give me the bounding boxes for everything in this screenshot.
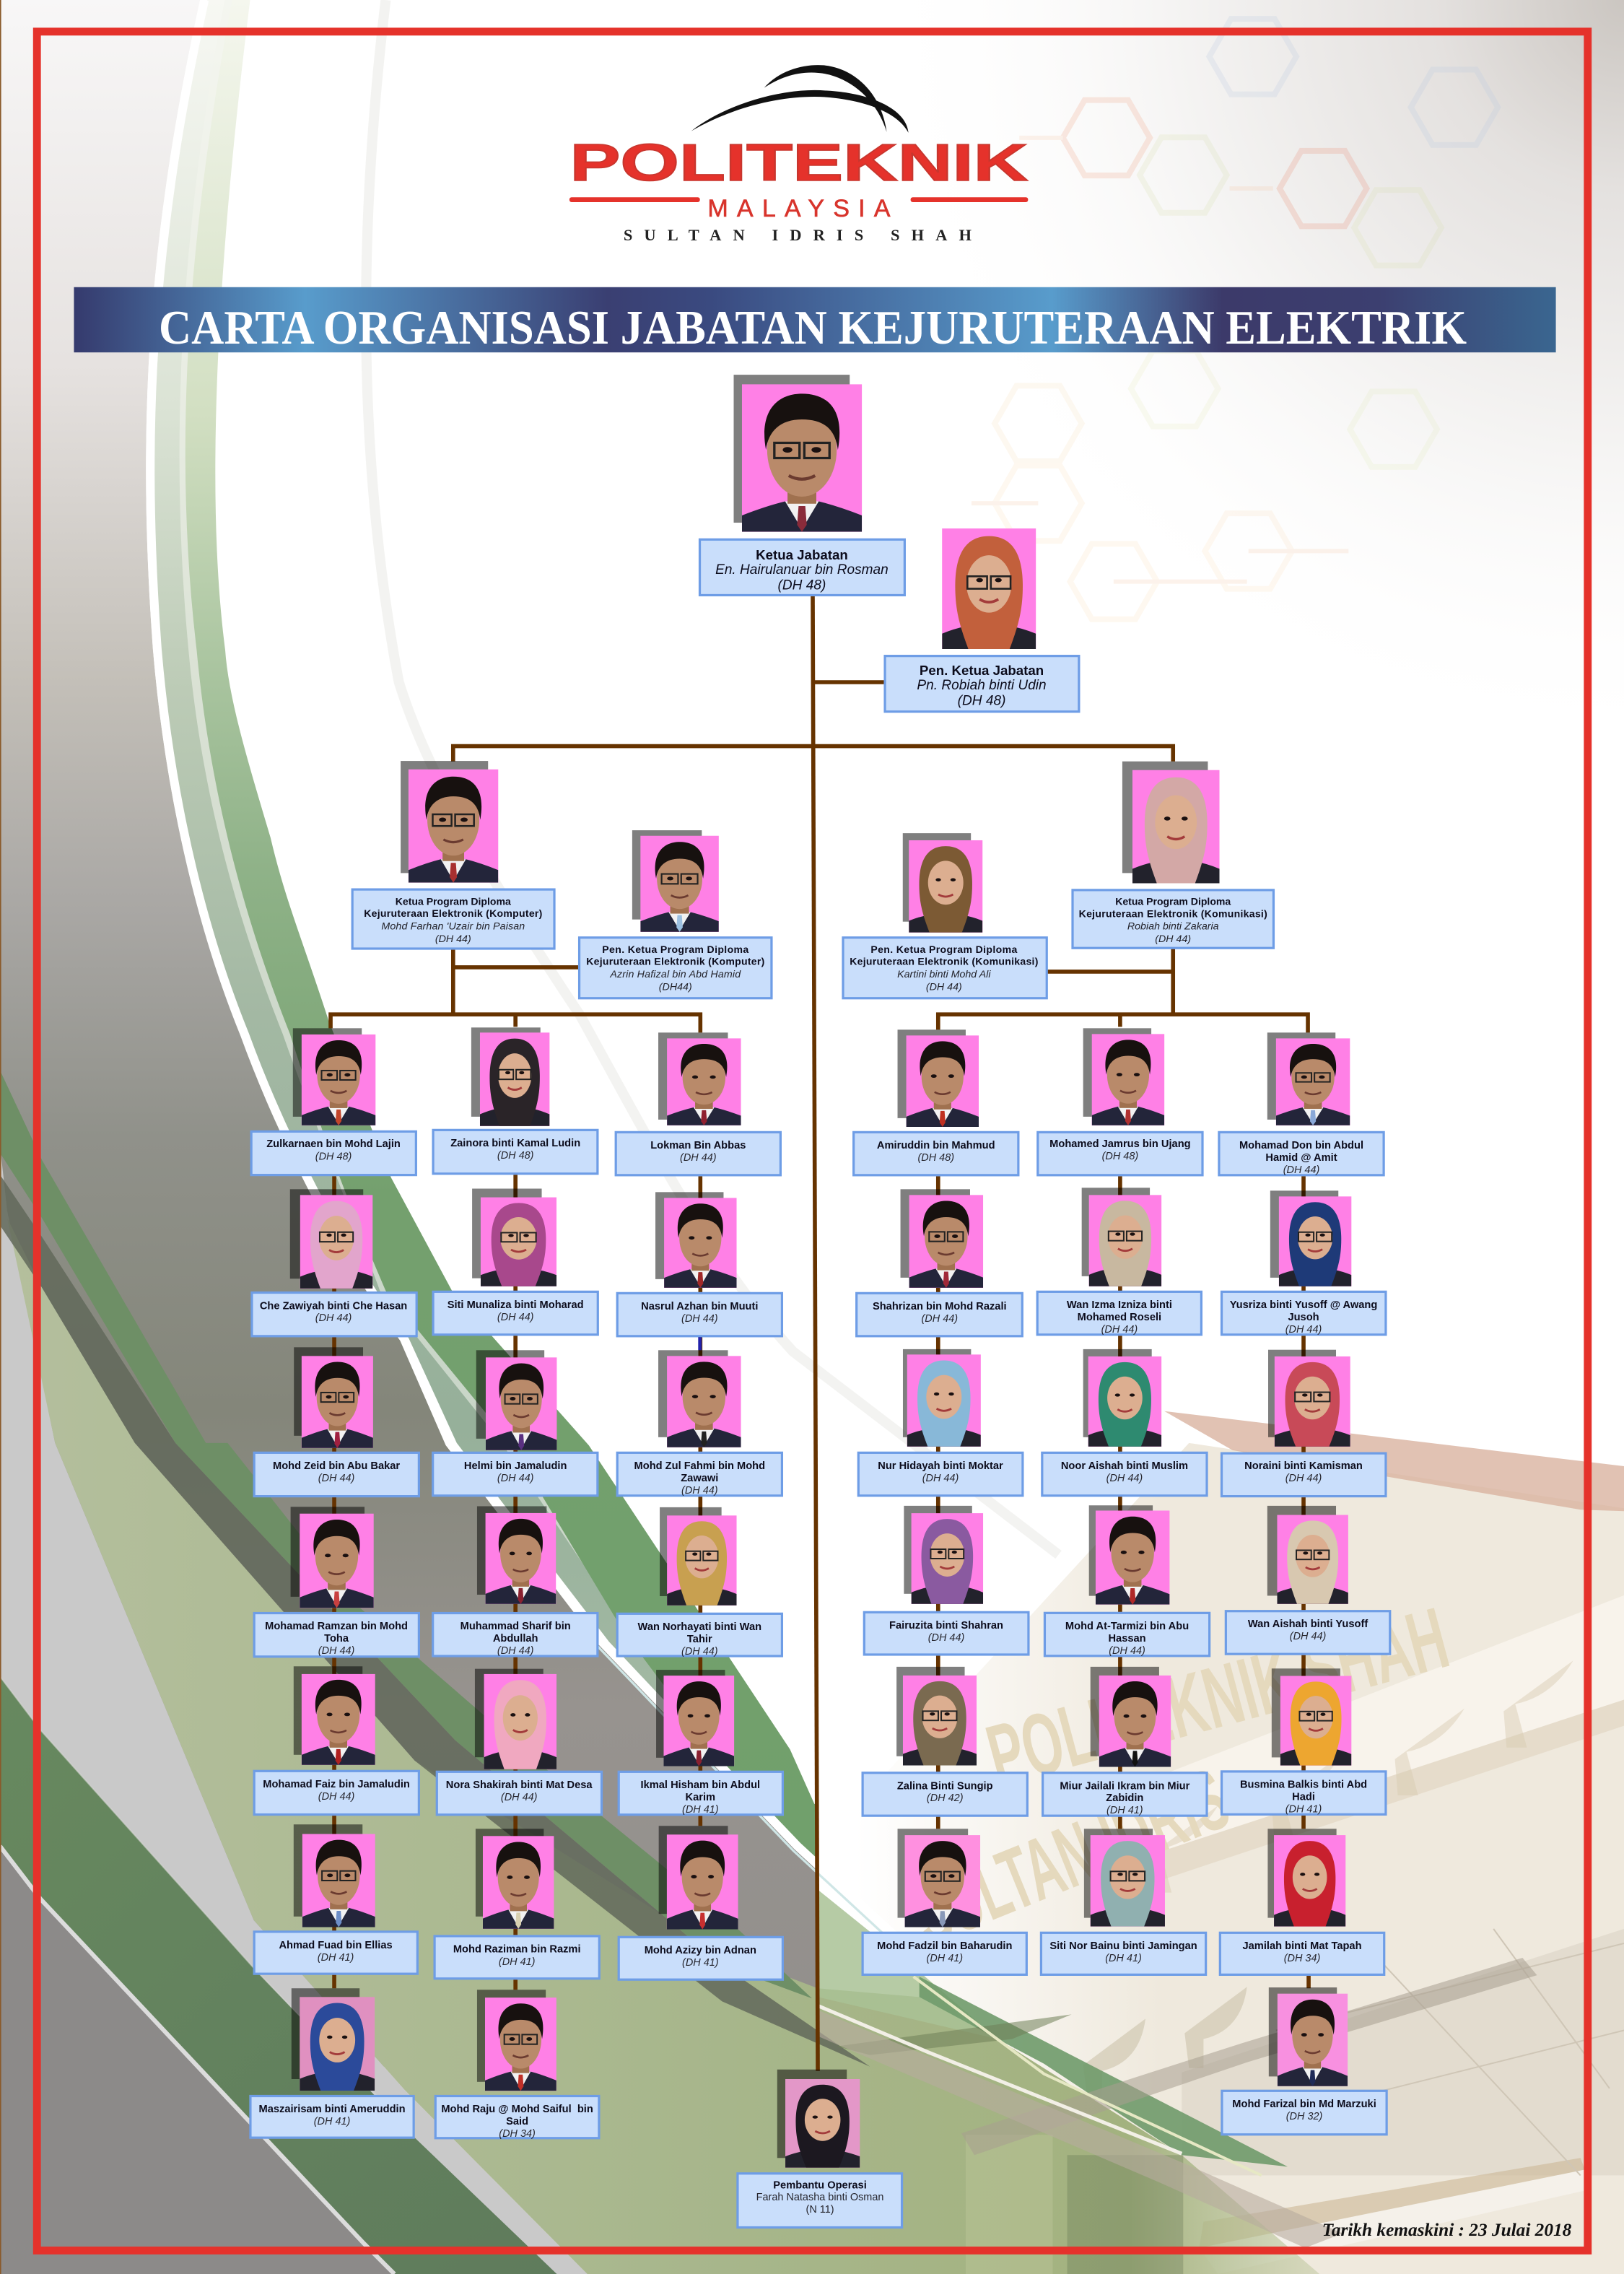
photo bbox=[1089, 1505, 1169, 1605]
label: Mohd Farizal bin Md Marzuki bbox=[1232, 2099, 1376, 2110]
person: Pen. Ketua Program Komunikasi bbox=[843, 833, 1047, 998]
person: Mohamad Faiz bin Jamaludin bbox=[254, 1666, 419, 1815]
person: Yusriza binti Yusoff @ Awang Jusoh bbox=[1222, 1190, 1386, 1336]
label: Wan Aishah binti Yusoff bbox=[1248, 1619, 1368, 1630]
label: (DH 48) bbox=[497, 1150, 533, 1162]
label: Noor Aishah binti Muslim bbox=[1061, 1460, 1188, 1472]
label: Pen. Ketua Jabatan: (DH 48) bbox=[958, 693, 1005, 708]
person: Nora Shakirah binti Mat Desa bbox=[437, 1669, 602, 1815]
photo bbox=[294, 1347, 373, 1448]
label: (DH 44) bbox=[681, 1313, 718, 1325]
label bbox=[254, 1452, 419, 1497]
label bbox=[433, 1130, 598, 1174]
person: Lokman Bin Abbas bbox=[616, 1032, 780, 1175]
person: Ketua Program Komunikasi bbox=[1073, 762, 1273, 948]
photo bbox=[1267, 1506, 1348, 1604]
photo: Hairulanuar bin Rosman bbox=[734, 375, 862, 532]
label: Mohamad Don bin Abdul bbox=[1239, 1140, 1363, 1151]
photo: Kartini binti Mohd Ali bbox=[903, 833, 982, 933]
logo: Politeknik Malaysia Sultan Idris Shah: MALAYSIA bbox=[707, 195, 891, 222]
label: Ketua Program Diploma Komputer bbox=[352, 889, 554, 949]
photo bbox=[1083, 1028, 1164, 1125]
label: Wan Izma Izniza binti bbox=[1067, 1299, 1172, 1311]
label: (DH 41) bbox=[499, 1956, 535, 1968]
label: (DH 44) bbox=[928, 1632, 964, 1644]
label: (DH 41) bbox=[682, 1804, 719, 1816]
label bbox=[250, 2096, 414, 2138]
label: Pen. Ketua Program Diploma Komputer: Kejuruteraan Elektronik (Komputer) bbox=[586, 956, 764, 967]
photo bbox=[476, 1350, 556, 1450]
label: (DH 44) bbox=[497, 1473, 533, 1484]
label: (DH 44) bbox=[1109, 1645, 1145, 1657]
label bbox=[619, 1772, 782, 1816]
label: (DH 44) bbox=[315, 1312, 352, 1324]
photo bbox=[1083, 1349, 1161, 1447]
label: (DH 44) bbox=[1285, 1473, 1322, 1484]
label: Pen. Ketua Program Diploma Komputer: Azrin Hafizal bin Abd Hamid bbox=[609, 969, 741, 980]
person: Mohd Fadzil bin Baharudin bbox=[863, 1829, 1026, 1974]
label: (DH 44) bbox=[501, 1792, 537, 1803]
label bbox=[857, 1293, 1022, 1336]
label bbox=[863, 1933, 1026, 1974]
person: Che Zawiyah binti Che Hasan bbox=[252, 1189, 416, 1336]
label: Wan Norhayati binti Wan bbox=[638, 1621, 761, 1633]
label: Miur Jailali Ikram bin Miur bbox=[1060, 1780, 1190, 1792]
label: Ketua Program Diploma Komputer: Ketua Program Diploma bbox=[396, 896, 511, 907]
label: Amiruddin bin Mahmud bbox=[877, 1140, 995, 1151]
photo bbox=[477, 1990, 556, 2091]
photo bbox=[1091, 1667, 1171, 1767]
photo bbox=[896, 1667, 977, 1765]
label: Nasrul Azhan bin Muuti bbox=[641, 1301, 758, 1312]
person: Wan Norhayati binti Wan Tahir bbox=[617, 1507, 782, 1657]
label: (DH 44) bbox=[1290, 1631, 1326, 1642]
label bbox=[1044, 1613, 1210, 1657]
person: Amiruddin bin Mahmud bbox=[854, 1029, 1018, 1175]
photo bbox=[476, 1829, 554, 1929]
connector lines of the organisation chart bbox=[331, 596, 1309, 2071]
label: Ketua Jabatan: En. Hairulanuar bin Rosman bbox=[715, 562, 889, 578]
label: Che Zawiyah binti Che Hasan bbox=[260, 1300, 407, 1312]
person: Mohd Azizy bin Adnan bbox=[619, 1826, 782, 1979]
label: Pen. Ketua Program Diploma Komunikasi bbox=[843, 938, 1047, 998]
person: Mohamad Ramzan bin Mohd Toha bbox=[254, 1507, 419, 1657]
label: (DH 44) bbox=[318, 1645, 354, 1657]
label: Pen. Ketua Program Diploma Komputer bbox=[580, 938, 772, 998]
label: Fairuzita binti Shahran bbox=[889, 1620, 1003, 1632]
label bbox=[433, 1613, 598, 1657]
person: Nasrul Azhan bin Muuti bbox=[617, 1192, 782, 1336]
label bbox=[435, 2096, 599, 2140]
label: Pembantu Operasi: Pembantu Operasi bbox=[773, 2179, 867, 2191]
photo bbox=[898, 1029, 979, 1127]
label: (DH 44) bbox=[1283, 1164, 1319, 1176]
photo: Azrin Hafizal bbox=[632, 830, 719, 932]
person: Noraini binti Kamisman bbox=[1222, 1350, 1386, 1497]
label: Nora Shakirah binti Mat Desa bbox=[446, 1779, 593, 1791]
person: Mohamad Don bin Abdul Hamid @ Amit bbox=[1219, 1032, 1384, 1176]
photo bbox=[658, 1337, 741, 1447]
person: Pen. Ketua Program Komputer bbox=[580, 830, 772, 998]
label: (DH 41) bbox=[314, 2116, 350, 2127]
label: Pen. Ketua Program Diploma Komunikasi: Kartini binti Mohd Ali bbox=[897, 969, 991, 980]
label: Zainora binti Kamal Ludin bbox=[450, 1138, 580, 1149]
label: Ketua Program Diploma Komunikasi: Kejuruteraan Elektronik (Komunikasi) bbox=[1079, 908, 1267, 920]
photo bbox=[471, 1027, 549, 1126]
label: (DH 34) bbox=[499, 2128, 536, 2140]
person: Mohd Farizal bin Md Marzuki bbox=[1222, 1987, 1387, 2135]
label: Pen. Ketua Program Diploma Komputer: Pen. Ketua Program Diploma bbox=[602, 944, 748, 955]
photo bbox=[1269, 1987, 1348, 2086]
label: Mohd Fadzil bin Baharudin bbox=[877, 1940, 1012, 1952]
label: Zulkarnaen bin Mohd Lajin bbox=[266, 1138, 401, 1150]
label: Ketua Program Diploma Komunikasi: Ketua Program Diploma bbox=[1115, 896, 1231, 907]
label: Pen. Ketua Program Diploma Komunikasi: (DH 44) bbox=[926, 982, 962, 993]
photo bbox=[1270, 1190, 1351, 1286]
label: Zawawi bbox=[681, 1473, 718, 1484]
label bbox=[1038, 1132, 1202, 1175]
person: Zulkarnaen bin Mohd Lajin bbox=[251, 1028, 416, 1175]
photo bbox=[294, 1824, 375, 1927]
label: Yusriza binti Yusoff @ Awang bbox=[1230, 1299, 1377, 1311]
label: Mohamed Jamrus bin Ujang bbox=[1049, 1138, 1191, 1150]
photo bbox=[658, 1032, 741, 1125]
label: (DH 41) bbox=[927, 1953, 963, 1964]
label bbox=[1042, 1452, 1207, 1496]
label: Hassan bbox=[1108, 1633, 1146, 1644]
label: (DH 41) bbox=[318, 1952, 354, 1964]
photo bbox=[1268, 1350, 1350, 1447]
title banner: CARTA ORGANISASI JABATAN KEJURUTERAAN ELEKTRIK bbox=[159, 302, 1467, 354]
person: Wan Izma Izniza binti Mohamed Roseli bbox=[1037, 1188, 1201, 1336]
photo bbox=[1267, 1829, 1345, 1927]
photo bbox=[904, 1506, 983, 1604]
label bbox=[1226, 1611, 1390, 1654]
label: Zabidin bbox=[1106, 1792, 1143, 1804]
label: Ahmad Fuad bin Ellias bbox=[279, 1940, 393, 1951]
person: Fairuzita binti Shahran bbox=[864, 1506, 1029, 1655]
person: Ahmad Fuad bin Ellias bbox=[254, 1824, 417, 1974]
label bbox=[251, 1131, 416, 1175]
label bbox=[1043, 1773, 1207, 1816]
label: (DH 44) bbox=[681, 1646, 718, 1657]
label: Ketua Program Diploma Komunikasi bbox=[1073, 890, 1273, 948]
person: Noor Aishah binti Muslim bbox=[1042, 1349, 1207, 1496]
photo bbox=[291, 1507, 374, 1608]
label: Pembantu Operasi: Farah Natasha binti Osman bbox=[756, 2192, 883, 2203]
logo: Politeknik Malaysia Sultan Idris Shah: SULTAN IDRIS SHAH bbox=[624, 226, 972, 244]
photo bbox=[293, 1028, 375, 1125]
label: Toha bbox=[324, 1633, 349, 1644]
person: Nur Hidayah binti Moktar bbox=[858, 1349, 1023, 1496]
label: (DH 44) bbox=[497, 1312, 533, 1323]
photo: Robiah binti Udin bbox=[942, 528, 1036, 649]
label: (DH 44) bbox=[1106, 1473, 1143, 1484]
label: Pen. Ketua Jabatan: Pn. Robiah binti Udin bbox=[917, 678, 1047, 693]
label: (DH 44) bbox=[1101, 1324, 1138, 1336]
label: (DH 34) bbox=[1284, 1953, 1320, 1964]
label bbox=[254, 1932, 417, 1974]
label bbox=[616, 1132, 780, 1175]
person: Mohd At-Tarmizi bin Abu Hassan bbox=[1044, 1505, 1210, 1657]
label: Pembantu Operasi bbox=[738, 2174, 902, 2228]
label: Ketua Program Diploma Komputer: Kejuruteraan Elektronik (Komputer) bbox=[364, 907, 542, 919]
label: Maszairisam binti Ameruddin bbox=[259, 2104, 406, 2115]
label: Jusoh bbox=[1288, 1312, 1319, 1323]
label: Mohamed Roseli bbox=[1078, 1312, 1161, 1323]
label bbox=[252, 1293, 416, 1336]
label: Muhammad Sharif bin bbox=[460, 1621, 571, 1632]
label bbox=[617, 1452, 782, 1497]
photo bbox=[660, 1507, 737, 1606]
label bbox=[863, 1773, 1027, 1816]
person: Siti Nor Bainu binti Jamingan bbox=[1041, 1829, 1206, 1974]
label: (DH 48) bbox=[315, 1151, 352, 1163]
label: Tahir bbox=[687, 1634, 712, 1645]
label bbox=[864, 1612, 1029, 1655]
person: Mohd Zul Fahmi bin Mohd Zawawi bbox=[617, 1337, 782, 1497]
person: Shahrizan bin Mohd Razali bbox=[857, 1189, 1022, 1336]
person: Ikmal Hisham bin Abdul Karim bbox=[619, 1670, 782, 1816]
logo: Politeknik Malaysia Sultan Idris Shah: POLITEKNIK bbox=[570, 134, 1028, 192]
label: (DH 41) bbox=[1106, 1805, 1143, 1816]
person: Helmi bin Jamaludin bbox=[433, 1350, 598, 1496]
label bbox=[619, 1937, 782, 1979]
photo: Farah Natasha binti Osman bbox=[777, 2070, 860, 2168]
label bbox=[1222, 2091, 1387, 2135]
label: Mohd Raju @ Mohd Saiful bin bbox=[441, 2104, 593, 2115]
label: Mohd Raziman bin Razmi bbox=[453, 1944, 581, 1956]
label: (DH 44) bbox=[680, 1152, 717, 1164]
label: Siti Nor Bainu binti Jamingan bbox=[1049, 1940, 1197, 1952]
label: Lokman Bin Abbas bbox=[650, 1140, 746, 1151]
label: Mohd Zeid bin Abu Bakar bbox=[273, 1460, 400, 1472]
photo bbox=[659, 1826, 738, 1929]
label: Karim bbox=[686, 1792, 715, 1803]
person: Mohamed Jamrus bin Ujang bbox=[1038, 1028, 1202, 1175]
label bbox=[1222, 1453, 1386, 1497]
label: Pen. Ketua Jabatan bbox=[885, 656, 1079, 712]
label: Zalina Binti Sungip bbox=[897, 1780, 993, 1792]
label bbox=[1041, 1933, 1206, 1974]
label bbox=[1037, 1291, 1201, 1336]
label: Mohd Azizy bin Adnan bbox=[645, 1945, 756, 1956]
label bbox=[254, 1771, 419, 1815]
label: Pen. Ketua Program Diploma Komunikasi: Pen. Ketua Program Diploma bbox=[870, 944, 1017, 955]
person: Mohd Raju @ Mohd Saiful bin Said bbox=[435, 1990, 599, 2140]
label: Nur Hidayah binti Moktar bbox=[878, 1460, 1003, 1472]
label: Hadi bbox=[1292, 1791, 1315, 1803]
label: (DH 44) bbox=[318, 1791, 354, 1803]
label bbox=[1220, 1933, 1384, 1974]
photo: Robiah binti Zakaria bbox=[1122, 762, 1220, 883]
label: (DH 41) bbox=[1105, 1953, 1142, 1964]
label: (DH 41) bbox=[682, 1957, 719, 1969]
photo bbox=[898, 1829, 980, 1927]
label: (DH 48) bbox=[1102, 1151, 1138, 1162]
person: Maszairisam binti Ameruddin bbox=[250, 1988, 414, 2138]
label bbox=[433, 1452, 598, 1496]
photo bbox=[1084, 1829, 1165, 1927]
label: (DH 44) bbox=[921, 1313, 958, 1325]
person: Pen. Ketua Jabatan bbox=[885, 528, 1079, 712]
person: Siti Munaliza binti Moharad bbox=[433, 1189, 598, 1335]
person: Busmina Balkis binti Abd Hadi bbox=[1222, 1668, 1386, 1815]
date note: Tarikh kemaskini : 23 Julai 2018 bbox=[1322, 2221, 1572, 2240]
background: swoosh and building artwork: SULTAN IDRIS bbox=[899, 1749, 1241, 1964]
label: Ketua Program Diploma Komputer: (DH 44) bbox=[435, 933, 471, 945]
person: Zainora binti Kamal Ludin bbox=[433, 1027, 598, 1174]
label bbox=[437, 1772, 602, 1815]
person: Ketua Program Komputer bbox=[352, 761, 554, 949]
label: (DH 44) bbox=[318, 1473, 354, 1484]
person: Ketua Jabatan bbox=[700, 375, 904, 595]
label: Pen. Ketua Jabatan: Pen. Ketua Jabatan bbox=[920, 663, 1044, 678]
label: (DH 44) bbox=[497, 1645, 533, 1657]
label bbox=[858, 1452, 1023, 1496]
label: (DH 48) bbox=[917, 1152, 954, 1164]
label bbox=[435, 1936, 599, 1979]
label: Ketua Program Diploma Komunikasi: (DH 44) bbox=[1155, 933, 1191, 945]
logo: Politeknik Malaysia Sultan Idris Shah bbox=[569, 65, 1028, 244]
photo bbox=[901, 1189, 983, 1288]
photo: Mohd Farhan bbox=[401, 761, 498, 883]
person: Wan Aishah binti Yusoff bbox=[1226, 1506, 1390, 1654]
label: Noraini binti Kamisman bbox=[1244, 1460, 1363, 1472]
label: (DH 42) bbox=[927, 1792, 964, 1804]
label bbox=[433, 1291, 598, 1335]
person: Zalina Binti Sungip bbox=[863, 1667, 1027, 1816]
photo bbox=[903, 1349, 981, 1447]
photo bbox=[292, 1988, 375, 2091]
label: Ketua Jabatan: (DH 48) bbox=[778, 578, 826, 593]
label: (DH 44) bbox=[1285, 1324, 1322, 1336]
label: Mohamad Ramzan bin Mohd bbox=[265, 1621, 408, 1632]
photo bbox=[290, 1189, 372, 1289]
label bbox=[1219, 1132, 1384, 1176]
label: (DH 44) bbox=[922, 1473, 959, 1484]
label: Mohd Zul Fahmi bin Mohd bbox=[634, 1460, 765, 1472]
photo bbox=[1082, 1188, 1161, 1286]
photo bbox=[294, 1666, 375, 1765]
label: Pembantu Operasi: (N 11) bbox=[806, 2204, 834, 2216]
label: Helmi bin Jamaludin bbox=[464, 1460, 567, 1472]
person: Jamilah binti Mat Tapah bbox=[1220, 1829, 1384, 1974]
label: Shahrizan bin Mohd Razali bbox=[873, 1301, 1007, 1312]
label: Ikmal Hisham bin Abdul bbox=[641, 1779, 760, 1791]
label: Said bbox=[506, 2116, 528, 2127]
label: (DH 44) bbox=[681, 1485, 718, 1497]
label: Hamid @ Amit bbox=[1265, 1152, 1337, 1164]
label: (DH 32) bbox=[1286, 2111, 1322, 2122]
label: Busmina Balkis binti Abd bbox=[1240, 1779, 1367, 1791]
label: Ketua Jabatan bbox=[700, 539, 904, 595]
label: Ketua Jabatan: Ketua Jabatan bbox=[756, 547, 848, 562]
label bbox=[1222, 1291, 1386, 1336]
label: Siti Munaliza binti Moharad bbox=[448, 1299, 584, 1311]
photo bbox=[475, 1669, 556, 1769]
label: Jamilah binti Mat Tapah bbox=[1242, 1940, 1362, 1952]
label: Pen. Ketua Program Diploma Komputer: (DH44) bbox=[659, 982, 692, 993]
label: Pen. Ketua Program Diploma Komunikasi: Kejuruteraan Elektronik (Komunikasi) bbox=[850, 956, 1038, 967]
photo bbox=[477, 1506, 556, 1604]
label: Ketua Program Diploma Komunikasi: Robiah binti Zakaria bbox=[1127, 921, 1219, 933]
photo bbox=[472, 1189, 556, 1286]
label: (DH 41) bbox=[1285, 1803, 1322, 1815]
photo bbox=[1267, 1032, 1350, 1125]
person: Muhammad Sharif bin Abdullah bbox=[433, 1506, 598, 1657]
label: Mohamad Faiz bin Jamaludin bbox=[263, 1779, 410, 1790]
photo bbox=[655, 1192, 737, 1288]
label bbox=[254, 1613, 419, 1657]
label bbox=[1222, 1772, 1386, 1815]
person: Miur Jailali Ikram bin Miur Zabidin bbox=[1043, 1667, 1207, 1816]
label bbox=[617, 1293, 782, 1336]
label bbox=[617, 1613, 782, 1657]
label: Mohd At-Tarmizi bin Abu bbox=[1065, 1621, 1189, 1632]
label: Abdullah bbox=[493, 1633, 538, 1644]
photo bbox=[656, 1670, 734, 1766]
photo bbox=[1272, 1668, 1351, 1766]
person: Mohd Zeid bin Abu Bakar bbox=[254, 1347, 419, 1497]
person: Mohd Raziman bin Razmi bbox=[435, 1829, 599, 1979]
label: Ketua Program Diploma Komputer: Mohd Farhan 'Uzair bin Paisan bbox=[381, 920, 525, 932]
label bbox=[854, 1132, 1018, 1175]
person: Pembantu Operasi bbox=[738, 2070, 902, 2228]
